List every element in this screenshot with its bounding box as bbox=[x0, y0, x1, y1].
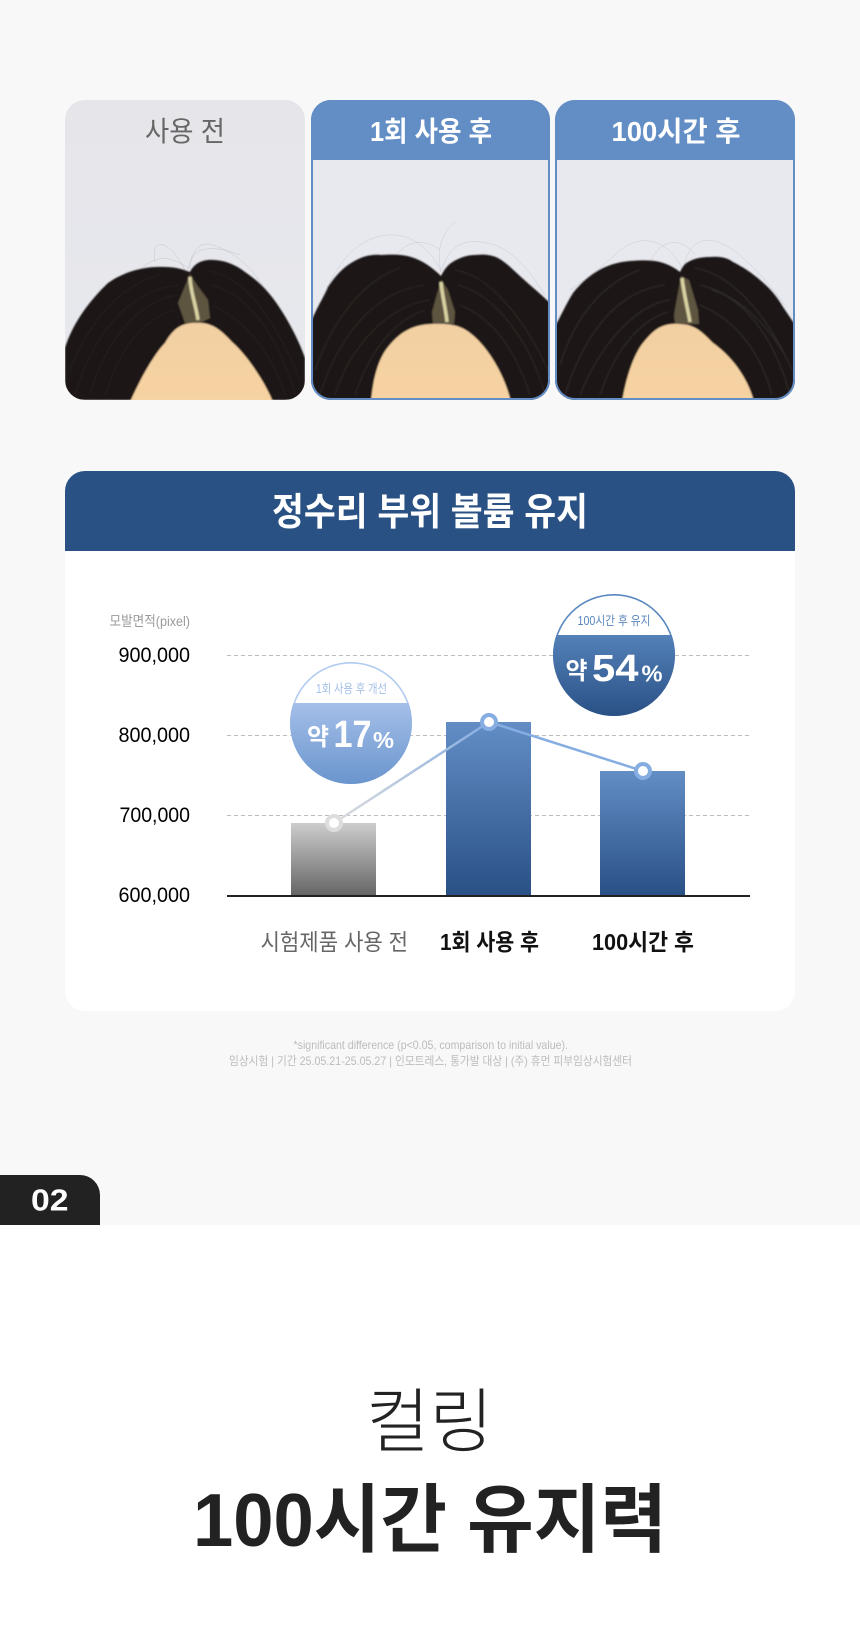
x axis labels: 100시간 후 bbox=[592, 929, 694, 955]
forehead 100 hours bbox=[622, 324, 754, 402]
panel: after 100 hours bbox=[555, 160, 795, 400]
heading: curling: 컬링 bbox=[366, 1383, 493, 1461]
heading: 100 hour hold: 100시간 유지력 bbox=[193, 1478, 667, 1562]
line chart bbox=[327, 715, 650, 830]
flyaway hairs one use bbox=[322, 222, 545, 300]
flyaway hairs before bbox=[140, 244, 266, 290]
label: after one use: 1회 사용 후 bbox=[370, 116, 492, 147]
callout: 54 percent: 54 bbox=[592, 648, 638, 690]
bar chart bbox=[227, 722, 750, 897]
y axis labels: 800,000 bbox=[118, 724, 190, 747]
chart title: 정수리 부위 볼륨 유지 bbox=[272, 492, 588, 534]
y axis unit: 모발면적(pixel) bbox=[110, 613, 190, 629]
bar: before bbox=[291, 823, 376, 895]
page background bbox=[0, 0, 860, 1225]
footnote: *significant difference (p<0.05, comparison to initial value). bbox=[294, 1038, 568, 1052]
callout: 17 percent: 1회 사용 후 개선 bbox=[316, 682, 387, 696]
callout: 17 percent: 17 bbox=[334, 714, 372, 756]
panel frame: after one use bbox=[312, 101, 549, 399]
photo: hair before bbox=[65, 260, 305, 402]
y axis labels bbox=[118, 644, 190, 907]
badge: 02 bbox=[0, 1175, 100, 1225]
point: one use bbox=[482, 715, 496, 729]
section background bbox=[0, 1225, 860, 1651]
panel frame: after 100 hours bbox=[556, 101, 794, 399]
callout: 17 percent: 약 bbox=[307, 724, 329, 751]
footnote bbox=[229, 1038, 632, 1068]
point: 100 hours bbox=[636, 764, 650, 778]
x axis labels: 시험제품 사용 전 bbox=[260, 929, 408, 955]
callout: 54 percent: 100시간 후 유지 bbox=[578, 614, 650, 628]
photo: hair one use bbox=[309, 255, 552, 402]
badge: 02: 02 bbox=[31, 1182, 68, 1218]
flyaway hairs 100 hours bbox=[570, 240, 785, 305]
forehead before bbox=[130, 323, 273, 402]
header: after 100 hours bbox=[555, 100, 795, 160]
x axis labels bbox=[260, 929, 694, 955]
forehead one use bbox=[371, 324, 511, 402]
scalp parting 100 hours bbox=[674, 276, 699, 324]
label: after 100 hours: 100시간 후 bbox=[612, 116, 740, 147]
photo: hair 100 hours bbox=[553, 257, 797, 402]
callout: 17 percent: % bbox=[373, 727, 394, 753]
panel: before use bbox=[65, 100, 305, 402]
callout: 54 percent bbox=[553, 595, 675, 717]
bar: one use bbox=[446, 722, 531, 895]
point: before bbox=[327, 816, 341, 830]
y axis labels: 600,000 bbox=[118, 884, 190, 907]
y axis labels: 700,000 bbox=[120, 804, 190, 827]
callout: 17 percent bbox=[290, 663, 412, 785]
x axis labels: 1회 사용 후 bbox=[440, 929, 539, 955]
x axis bbox=[227, 895, 750, 897]
bar: 100 hours bbox=[600, 771, 685, 895]
panel: chart card bbox=[65, 471, 795, 551]
header: after one use bbox=[311, 100, 550, 160]
panel: after one use bbox=[311, 160, 550, 400]
footnote: 임상시험 | 기간 25.05.21-25.05.27 | 인모트레스, 통가발 대상 | (주) 휴먼 피부임상시험센터 bbox=[229, 1054, 632, 1068]
label: before use: 사용 전 bbox=[145, 116, 225, 147]
chart card header bbox=[65, 471, 795, 551]
scalp parting before bbox=[178, 274, 210, 323]
callout: 54 percent: % bbox=[642, 660, 662, 686]
y axis labels: 900,000 bbox=[118, 644, 190, 667]
scalp parting one use bbox=[432, 280, 455, 324]
callout: 54 percent: 약 bbox=[566, 658, 588, 685]
